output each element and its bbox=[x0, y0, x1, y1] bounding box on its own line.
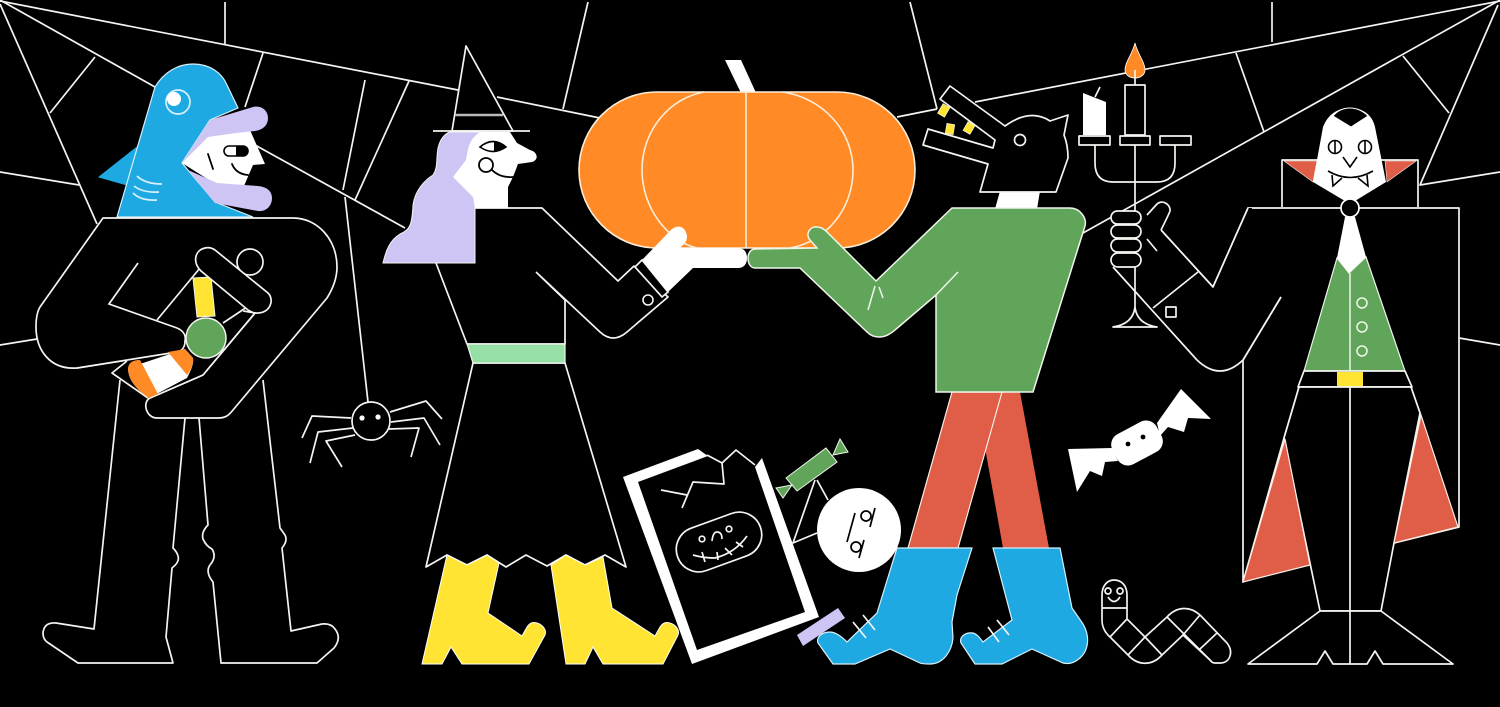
flame bbox=[1125, 43, 1145, 78]
head bbox=[923, 86, 1068, 192]
arms and base bbox=[1095, 145, 1175, 327]
cheek and smile bbox=[479, 158, 493, 172]
vampire face bbox=[1313, 108, 1386, 204]
stitched face pill bbox=[670, 506, 768, 578]
legs bbox=[43, 380, 338, 663]
eye pill bbox=[224, 146, 248, 156]
red collar lining bbox=[1284, 161, 1416, 182]
green wrapped candy bbox=[776, 439, 848, 543]
broken candle bbox=[1083, 93, 1106, 135]
plates bbox=[1079, 136, 1191, 145]
gravestone bbox=[623, 449, 819, 664]
fingers bbox=[1111, 211, 1141, 267]
stem bbox=[725, 60, 757, 95]
torso with arm bbox=[36, 218, 337, 418]
face bbox=[453, 132, 537, 208]
candelabra bbox=[1079, 43, 1191, 327]
shark eye bbox=[166, 90, 190, 114]
white hand bbox=[642, 227, 747, 292]
worm bbox=[1102, 580, 1231, 663]
wolf eye bbox=[1014, 134, 1026, 146]
hair bbox=[1333, 108, 1368, 127]
feet bbox=[1248, 611, 1453, 664]
left boot bbox=[818, 548, 972, 664]
teeth bbox=[938, 104, 975, 135]
inner body panel bbox=[112, 268, 247, 398]
pumpkin body bbox=[579, 92, 915, 248]
shark fin bbox=[99, 147, 137, 185]
arm crease and sleeve bbox=[77, 263, 185, 368]
lilac bar bbox=[797, 608, 845, 646]
upper jaw bbox=[182, 107, 268, 163]
white round candy bbox=[817, 488, 901, 572]
cuff button bbox=[1166, 307, 1176, 317]
yellow candy stick bbox=[193, 277, 215, 317]
thumb bbox=[1141, 202, 1170, 240]
hand on candelabra bbox=[1111, 202, 1170, 267]
white tie bbox=[1337, 217, 1366, 273]
skirt bbox=[426, 363, 626, 567]
coat bbox=[1161, 208, 1459, 582]
spider bbox=[302, 197, 442, 467]
right leg bbox=[975, 392, 1049, 548]
raised arm bbox=[1113, 208, 1281, 371]
right boot bbox=[961, 548, 1088, 664]
red cape left bbox=[1243, 439, 1310, 582]
trousers bbox=[1284, 387, 1420, 611]
pumpkin ribs bbox=[642, 92, 853, 248]
stone eyes bbox=[699, 536, 705, 542]
belt bbox=[1298, 371, 1412, 387]
hair bbox=[383, 132, 482, 263]
red cape right bbox=[1394, 415, 1458, 543]
cuff button bbox=[643, 295, 653, 305]
character: witch bbox=[383, 46, 679, 664]
green ball bbox=[186, 318, 226, 358]
left boot bbox=[422, 555, 546, 664]
lit candle bbox=[1125, 85, 1145, 135]
striped candy bbox=[128, 349, 193, 398]
sweater creases bbox=[868, 272, 958, 310]
stone frame bbox=[623, 449, 819, 664]
face bbox=[182, 128, 265, 186]
cuff bbox=[635, 260, 668, 297]
bat candy bbox=[1068, 389, 1211, 492]
character: vampire bbox=[1079, 43, 1459, 664]
cape collar box bbox=[1282, 160, 1418, 207]
lower jaw bbox=[188, 170, 272, 211]
fingers pill bbox=[196, 248, 271, 313]
character: shark costume fisher bbox=[36, 64, 338, 663]
pumpkin bbox=[579, 60, 915, 248]
right boot bbox=[551, 555, 679, 664]
shirt bbox=[1304, 257, 1405, 371]
facial features bbox=[1328, 140, 1373, 186]
hat bbox=[452, 46, 513, 131]
cracks bbox=[661, 450, 755, 508]
spider web: right bbox=[897, 0, 1500, 345]
nose and stitches bbox=[693, 532, 747, 562]
sweater bbox=[748, 208, 1085, 392]
spider web: left bbox=[0, 0, 600, 345]
circle knob bbox=[237, 249, 263, 275]
boot stitches bbox=[853, 615, 1009, 642]
witch hand bbox=[635, 227, 747, 305]
left leg bbox=[908, 392, 1002, 548]
belt bbox=[467, 344, 565, 363]
character: werewolf bbox=[748, 86, 1088, 664]
shark gills bbox=[133, 176, 162, 200]
shirt placket and buttons bbox=[1350, 273, 1367, 371]
neck bbox=[995, 191, 1040, 209]
shark head bbox=[117, 64, 253, 217]
dress bodice bbox=[436, 208, 668, 344]
eye bbox=[480, 142, 506, 152]
belt buckle bbox=[1337, 372, 1363, 387]
mouth and cheek bbox=[208, 154, 248, 175]
clasp bbox=[1341, 199, 1359, 217]
